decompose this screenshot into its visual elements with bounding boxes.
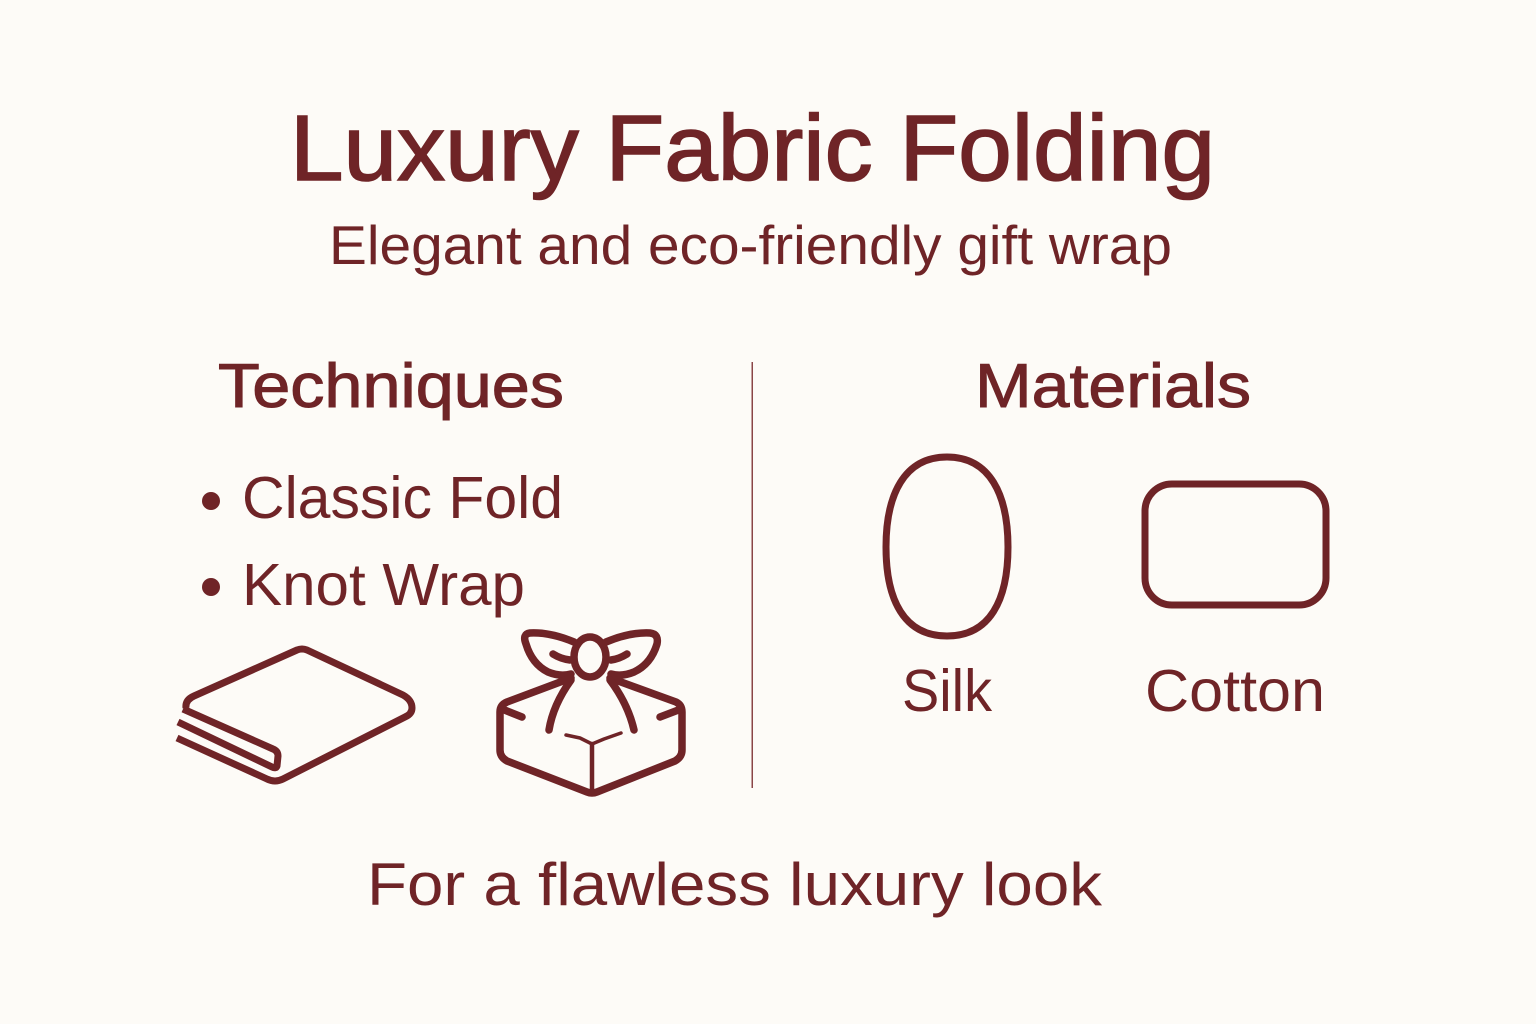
title: Luxury Fabric Folding — [290, 96, 1215, 200]
divider — [752, 362, 753, 788]
subtitle: Elegant and eco-friendly gift wrap — [329, 214, 1172, 276]
icon: cotton swatch — [1145, 484, 1326, 605]
list item: classic fold: Classic Fold — [242, 465, 563, 531]
footer tagline: For a flawless luxury look — [367, 851, 1103, 918]
label: cotton: Cotton — [1145, 658, 1325, 724]
icon: knotted gift wrap — [500, 633, 682, 793]
heading: materials: Materials — [975, 352, 1251, 421]
list item: knot wrap: Knot Wrap — [242, 552, 525, 618]
icon: silk swatch — [886, 457, 1008, 636]
icon: folded fabric — [177, 649, 412, 781]
heading: techniques: Techniques — [218, 352, 564, 421]
list: techniques — [202, 465, 563, 618]
label: silk: Silk — [902, 658, 992, 724]
